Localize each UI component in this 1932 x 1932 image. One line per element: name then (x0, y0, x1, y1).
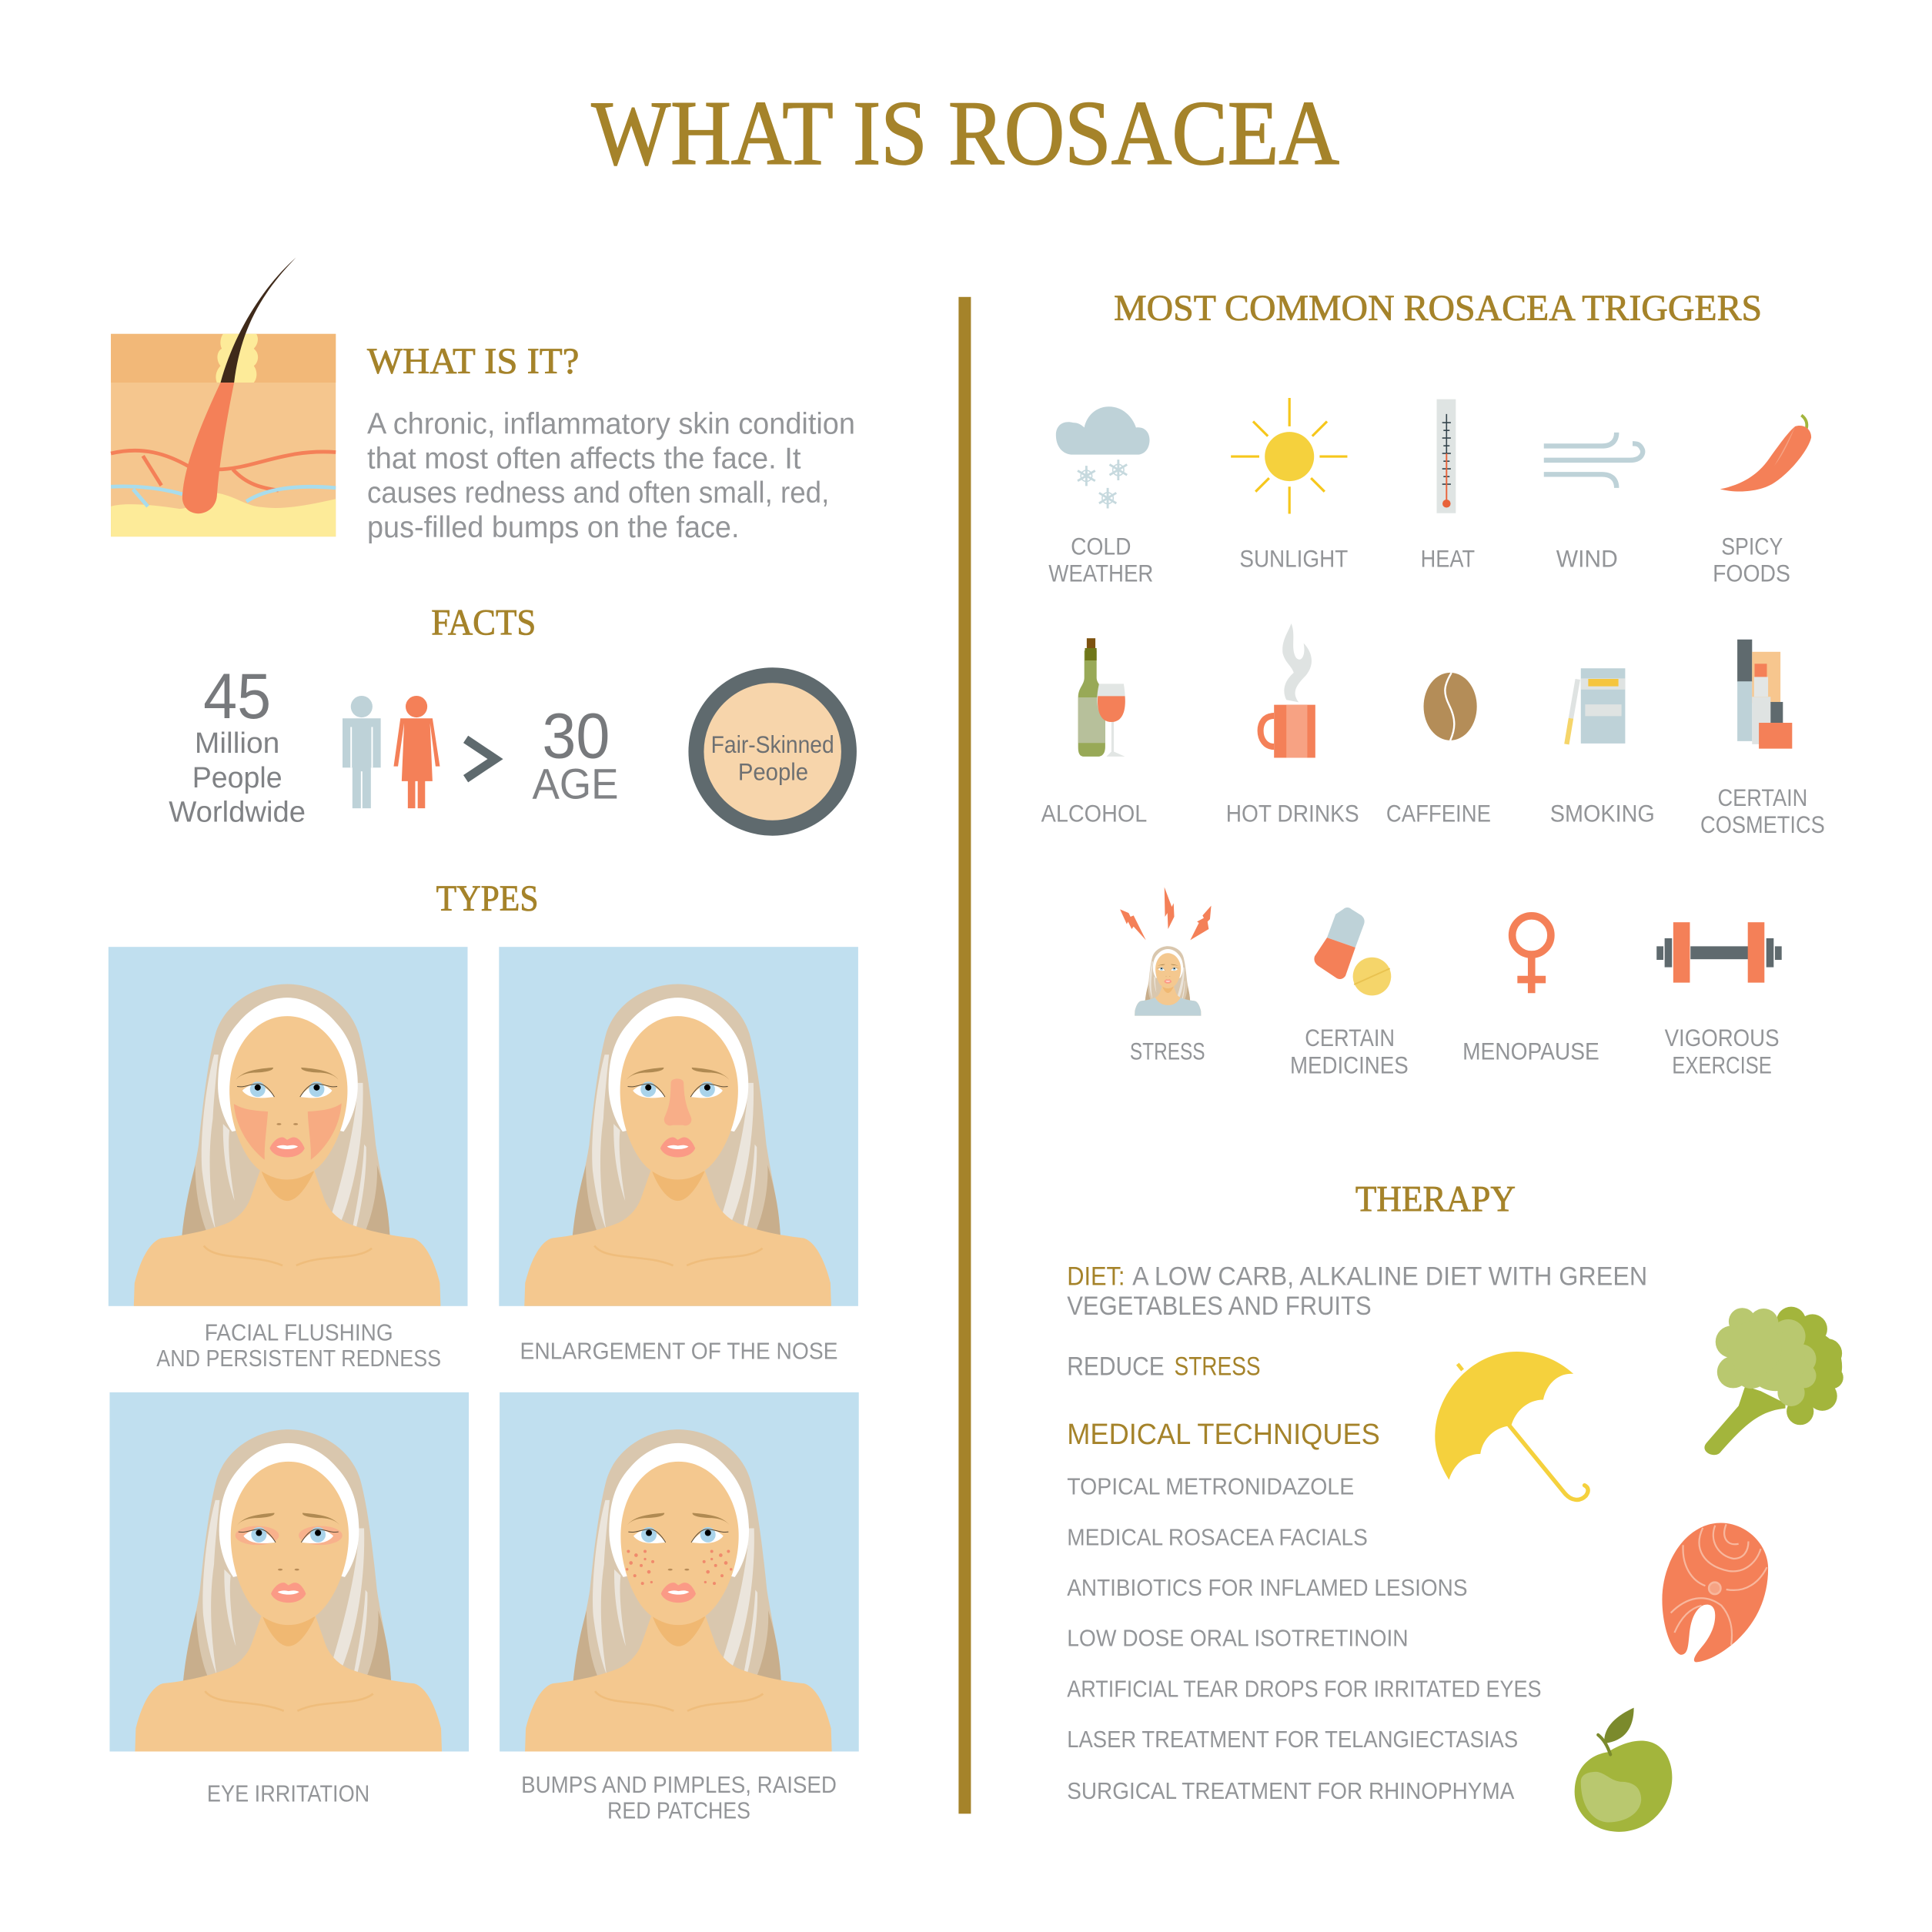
subheading: medical techniques: MEDICAL TECHNIQUES (1067, 1418, 1380, 1450)
list: medical techniques: SURGICAL TREATMENT FOR RHINOPHYMA (1067, 1778, 1515, 1804)
illustration: woman with bumps (525, 1429, 832, 1751)
trigger: certain cosmetics (1700, 640, 1825, 838)
text block: definition (367, 407, 855, 544)
icon: man (343, 696, 381, 808)
label: WEATHER (1048, 560, 1153, 587)
icon: stressed woman with lightning (1120, 887, 1212, 1016)
label: WIND (1556, 545, 1618, 572)
icon: wine bottle and glass (1078, 638, 1125, 757)
panel: facial flushing (109, 947, 467, 1372)
text block: definition: A chronic, inflammatory skin condition (367, 407, 855, 440)
label: CERTAIN (1717, 784, 1807, 811)
text block: definition: that most often affects the face. It (367, 442, 801, 475)
label: VIGOROUS (1665, 1024, 1780, 1051)
label (1290, 1024, 1409, 1078)
center divider (958, 297, 971, 1813)
text block: diet (1067, 1262, 1647, 1321)
icon: sun (1231, 398, 1347, 514)
text block: reduce stress (1067, 1352, 1261, 1381)
icon: dumbbell (1656, 922, 1782, 983)
icon: skin cross-section with hair follicle (111, 258, 336, 536)
icon: salmon steak (1662, 1523, 1768, 1662)
label: SPICY (1721, 533, 1783, 560)
trigger: hot drinks (1226, 623, 1359, 827)
list: medical techniques (1067, 1474, 1542, 1804)
trigger: stress (1120, 887, 1212, 1065)
caption: ENLARGEMENT OF THE NOSE (520, 1339, 838, 1365)
icon: thermometer (1436, 399, 1456, 513)
trigger: cold weather (1048, 406, 1153, 587)
trigger: smoking (1550, 668, 1655, 827)
heading: what is it: WHAT IS IT? (367, 341, 579, 382)
illustration: woman with irritated eyes (135, 1429, 442, 1751)
label: SMOKING (1550, 801, 1655, 827)
badge: fair-skinned people: People (738, 758, 808, 785)
text block: reduce stress: STRESS (1175, 1352, 1261, 1381)
text block: diet: DIET: (1067, 1262, 1125, 1292)
list: medical techniques: ARTIFICIAL TEAR DROPS FOR IRRITATED EYES (1067, 1676, 1542, 1702)
stat: age 30 (533, 700, 619, 807)
trigger: spicy foods (1713, 415, 1811, 587)
panel: enlargement of the nose (499, 947, 858, 1365)
icon: umbrella (1435, 1352, 1588, 1499)
stat: 45 million people: 45 (203, 660, 271, 732)
stat: age 30: 30 (542, 700, 610, 771)
trigger: caffeine (1386, 673, 1491, 827)
text block: definition: causes redness and often small, red, (367, 476, 829, 510)
heading: therapy: THERAPY (1355, 1179, 1516, 1220)
label (1665, 1024, 1780, 1078)
trigger: heat (1421, 399, 1475, 572)
panel: eye irritation (109, 1392, 469, 1807)
trigger: certain medicines (1290, 908, 1409, 1078)
badge: fair-skinned people (696, 675, 849, 828)
list: medical techniques: TOPICAL METRONIDAZOLE (1067, 1474, 1354, 1500)
trigger: menopause (1462, 916, 1599, 1065)
icon: cloud and snow (1056, 406, 1150, 508)
label: CAFFEINE (1386, 801, 1491, 827)
stat: 45 million people: Worldwide (169, 796, 306, 829)
caption: AND PERSISTENT REDNESS (156, 1345, 441, 1372)
caption: FACIAL FLUSHING (205, 1320, 393, 1346)
icon: wind lines (1544, 433, 1643, 488)
icon: greater than (466, 739, 496, 779)
text block: reduce stress: REDUCE (1067, 1352, 1165, 1381)
label (1700, 784, 1825, 838)
label: COSMETICS (1700, 811, 1825, 838)
stat: 45 million people: Million (195, 727, 279, 760)
trigger: wind (1544, 433, 1643, 572)
illustration: woman with enlarged nose (524, 984, 831, 1306)
text block: diet: VEGETABLES AND FRUITS (1067, 1292, 1372, 1321)
icon: broccoli (1704, 1307, 1843, 1455)
caption: EYE IRRITATION (207, 1780, 369, 1807)
label: ALCOHOL (1041, 801, 1147, 827)
stat: 45 million people (169, 660, 306, 829)
icon: chili pepper (1720, 415, 1811, 492)
icon: cigarette pack (1566, 668, 1625, 744)
label: STRESS (1130, 1038, 1205, 1065)
heading: types: TYPES (436, 878, 539, 919)
label (1713, 533, 1790, 587)
icon: capsule and tablet (1314, 908, 1391, 995)
heading: triggers: MOST COMMON ROSACEA TRIGGERS (1114, 288, 1762, 329)
stat: 45 million people: People (192, 761, 282, 794)
icon: steaming mug (1261, 623, 1315, 757)
panel: facts (169, 602, 849, 829)
trigger: sunlight (1231, 398, 1348, 572)
icon: woman (393, 696, 440, 808)
panel: bumps and pimples (500, 1392, 859, 1824)
icon: female symbol (1513, 916, 1551, 993)
label: MEDICINES (1290, 1051, 1409, 1078)
icon: coffee bean (1424, 673, 1477, 740)
caption: BUMPS AND PIMPLES, RAISED (521, 1772, 837, 1798)
label (1048, 533, 1153, 587)
title: WHAT IS ROSACEA (591, 82, 1339, 184)
heading: facts: FACTS (431, 602, 536, 643)
text block: definition: pus-filled bumps on the face. (367, 511, 739, 544)
caption (156, 1320, 441, 1372)
stat: age 30: AGE (533, 759, 619, 807)
caption: RED PATCHES (607, 1798, 750, 1824)
label: MENOPAUSE (1462, 1038, 1599, 1065)
list: medical techniques: ANTIBIOTICS FOR INFLAMED LESIONS (1067, 1575, 1468, 1601)
icon: apple (1575, 1708, 1672, 1832)
label: FOODS (1713, 560, 1790, 587)
badge: fair-skinned people: Fair-Skinned (711, 731, 834, 758)
label: HOT DRINKS (1226, 801, 1359, 827)
panel: therapy (1067, 1179, 1843, 1832)
panel: what is it (111, 258, 855, 544)
caption (521, 1772, 837, 1824)
icon: cosmetics (1737, 640, 1792, 749)
label: COLD (1071, 533, 1131, 560)
label: SUNLIGHT (1239, 545, 1348, 572)
text block: diet: A LOW CARB, ALKALINE DIET WITH GREEN (1132, 1262, 1647, 1292)
list: medical techniques: MEDICAL ROSACEA FACIALS (1067, 1524, 1368, 1550)
list: medical techniques: LASER TREATMENT FOR TELANGIECTASIAS (1067, 1726, 1518, 1753)
trigger: vigorous exercise (1656, 922, 1782, 1078)
trigger: alcohol (1041, 638, 1147, 827)
label: CERTAIN (1305, 1024, 1395, 1051)
label: HEAT (1421, 545, 1475, 572)
label: EXERCISE (1672, 1051, 1772, 1078)
illustration: woman with red cheeks (134, 984, 440, 1306)
list: medical techniques: LOW DOSE ORAL ISOTRETINOIN (1067, 1626, 1409, 1652)
